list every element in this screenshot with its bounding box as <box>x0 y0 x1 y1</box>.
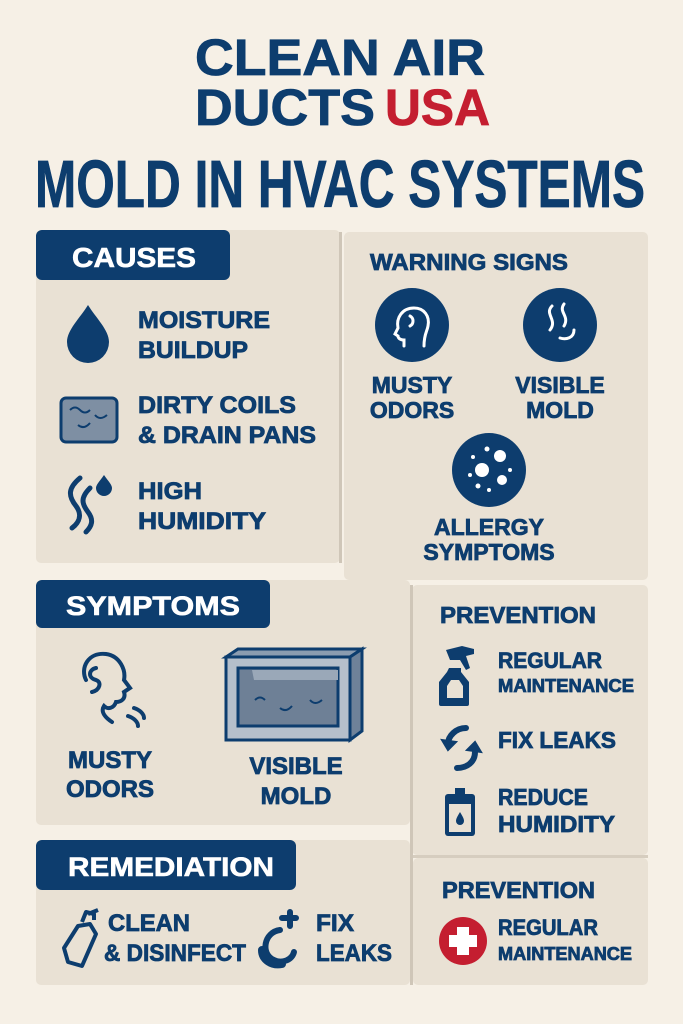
text: musty odors: ODORS <box>370 397 454 423</box>
text: musty odors <box>370 372 454 423</box>
text: dirty coils: & DRAIN PANS <box>138 422 316 449</box>
text: musty odors <box>66 747 154 803</box>
text: regular maintenance <box>498 648 634 696</box>
text: moisture buildup <box>138 307 270 364</box>
panel: symptoms <box>36 580 410 825</box>
icon: mold circle <box>523 288 597 362</box>
text: regular maintenance: MAINTENANCE <box>498 676 634 696</box>
text: regular maintenance: REGULAR <box>498 915 598 940</box>
text: visible mold <box>515 372 605 423</box>
heading: prevention: PREVENTION <box>442 877 595 903</box>
header: causes <box>36 230 230 280</box>
text: high humidity: HUMIDITY <box>138 508 266 535</box>
text: fix leaks: FIX LEAKS <box>498 727 616 753</box>
text: musty odors: MUSTY <box>372 372 452 398</box>
header: causes: CAUSES <box>72 242 196 273</box>
text: visible mold: MOLD <box>261 783 331 810</box>
text: reduce humidity <box>498 784 615 837</box>
icon: allergy circle <box>452 433 526 507</box>
icon: red cross <box>439 917 487 965</box>
panel: causes <box>36 230 342 563</box>
text: visible mold: VISIBLE <box>515 372 605 398</box>
header: remediation <box>36 840 296 890</box>
text: fix leaks: FIX <box>316 910 354 937</box>
text: visible mold: MOLD <box>526 397 594 423</box>
text: clean disinfect: CLEAN <box>108 910 190 937</box>
text: fix leaks <box>316 910 392 967</box>
icon: pipe leak <box>262 912 296 964</box>
text: visible mold <box>249 753 343 810</box>
title: brand <box>195 29 490 136</box>
title: brand: USA <box>385 79 490 136</box>
icon: head circle <box>375 288 449 362</box>
icon: face smell <box>84 654 144 726</box>
text: dirty coils <box>138 392 316 449</box>
text: allergy symptoms: SYMPTOMS <box>423 539 555 565</box>
heading: prevention: PREVENTION <box>440 602 596 628</box>
text: clean disinfect: & DISINFECT <box>104 940 246 967</box>
text: clean disinfect <box>104 910 246 967</box>
icon: humidity bottle <box>445 788 475 836</box>
text: regular maintenance: MAINTENANCE <box>498 944 632 964</box>
heading: warning signs: WARNING SIGNS <box>370 249 568 275</box>
header: remediation: REMEDIATION <box>68 852 274 882</box>
text: moisture buildup: BUILDUP <box>138 337 248 364</box>
text: dirty coils: DIRTY COILS <box>138 392 296 419</box>
text: high humidity: HIGH <box>138 478 202 505</box>
icon: water drop <box>67 305 109 363</box>
icon: mold box <box>226 649 362 740</box>
icon: spray bottle <box>439 646 474 706</box>
panel: remediation <box>36 840 410 985</box>
text: musty odors: ODORS <box>66 776 154 803</box>
text: high humidity <box>138 478 266 535</box>
icon: dirty coil <box>61 398 117 442</box>
title: brand: CLEAN AIR <box>195 29 485 86</box>
icon: arrows cycle <box>442 728 481 768</box>
text: moisture buildup: MOISTURE <box>138 307 270 334</box>
text: regular maintenance <box>498 915 632 964</box>
text: allergy symptoms <box>423 514 555 565</box>
text: reduce humidity: REDUCE <box>498 784 588 810</box>
panel: prevention 2 <box>413 855 648 985</box>
header: symptoms: SYMPTOMS <box>66 591 240 621</box>
panel: prevention <box>410 585 648 985</box>
text: fix leaks: LEAKS <box>316 940 392 967</box>
text: regular maintenance: REGULAR <box>498 648 602 673</box>
text: allergy symptoms: ALLERGY <box>434 514 544 540</box>
icon: spray <box>64 910 98 966</box>
text: visible mold: VISIBLE <box>249 753 343 780</box>
text: reduce humidity: HUMIDITY <box>498 811 615 837</box>
title: brand: DUCTS <box>195 79 375 136</box>
text: musty odors: MUSTY <box>68 747 152 774</box>
icon: humidity <box>70 475 112 532</box>
panel: warning signs <box>344 232 648 580</box>
header: symptoms <box>36 580 270 628</box>
